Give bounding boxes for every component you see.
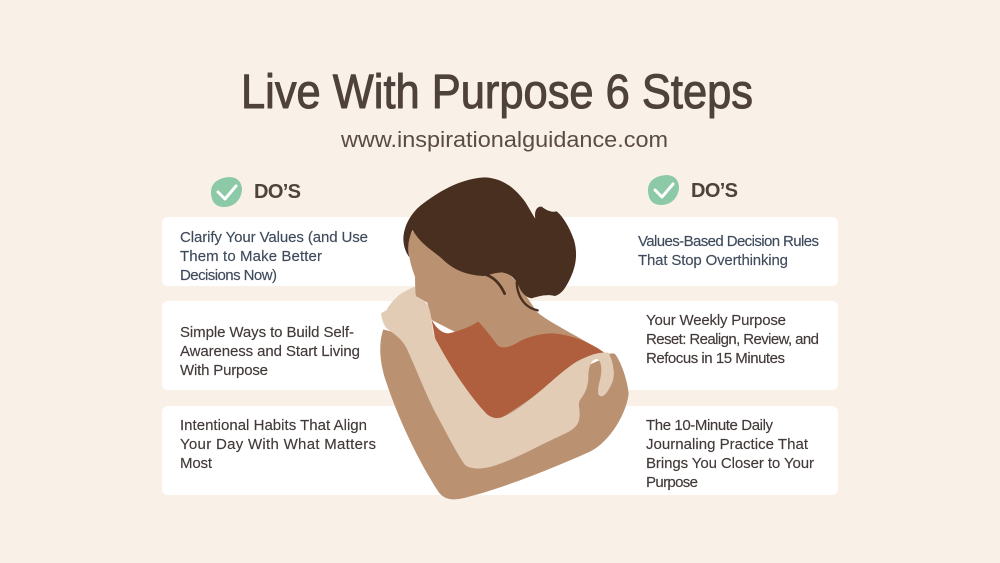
text: intentional habits [180, 417, 376, 472]
text: clarify your values [180, 229, 368, 284]
text: daily journaling: Purpose [646, 474, 698, 491]
panel: bottom row band [162, 406, 838, 495]
face and neck [408, 230, 603, 357]
red top [432, 320, 604, 418]
text: self-awareness [180, 324, 360, 379]
text: weekly reset: Reset: Realign, Review, and [646, 331, 819, 348]
text: self-awareness: With Purpose [180, 362, 268, 379]
title: Live With Purpose 6 Steps [241, 66, 753, 119]
text: weekly reset [646, 312, 819, 367]
text: decision rules: Values-Based Decision Rules [638, 233, 819, 250]
text: decision rules [638, 233, 819, 269]
text: self-awareness: Simple Ways to Build Self- [180, 324, 354, 341]
text: daily journaling: Journaling Practice That [646, 436, 809, 453]
left column heading [211, 177, 301, 207]
text: daily journaling: The 10-Minute Daily [646, 417, 774, 434]
panel: top row band [162, 217, 838, 286]
left heading text: DO’S [254, 181, 301, 203]
illustration: woman hugging herself [380, 177, 629, 499]
text: daily journaling: Brings You Closer to Your [646, 455, 814, 472]
icon: left check badge [211, 177, 242, 207]
text: daily journaling [646, 417, 814, 491]
text: intentional habits: Most [180, 455, 213, 472]
right heading text: DO’S [691, 180, 738, 202]
back arm and hand [380, 329, 629, 499]
text: clarify your values: Clarify Your Values (and Use [180, 229, 368, 246]
text: self-awareness: Awareness and Start Living [180, 343, 360, 360]
text: weekly reset: Your Weekly Purpose [646, 312, 786, 329]
text: clarify your values: Decisions Now) [180, 267, 277, 284]
text: intentional habits: Your Day With What Matters [180, 436, 376, 453]
panel: middle row band [162, 301, 838, 390]
text: weekly reset: Refocus in 15 Minutes [646, 350, 785, 367]
right column heading [648, 175, 738, 205]
text: intentional habits: Intentional Habits That Align [180, 417, 367, 434]
light forearm and hand [381, 287, 614, 469]
icon: right check badge [648, 175, 679, 205]
website url: www.inspirationalguidance.com [340, 127, 668, 152]
hair strand near neck [485, 274, 505, 294]
text: decision rules: That Stop Overthinking [638, 252, 788, 269]
hair [403, 177, 576, 298]
hair strand on neck [517, 283, 538, 310]
text: clarify your values: Them to Make Better [180, 248, 322, 265]
